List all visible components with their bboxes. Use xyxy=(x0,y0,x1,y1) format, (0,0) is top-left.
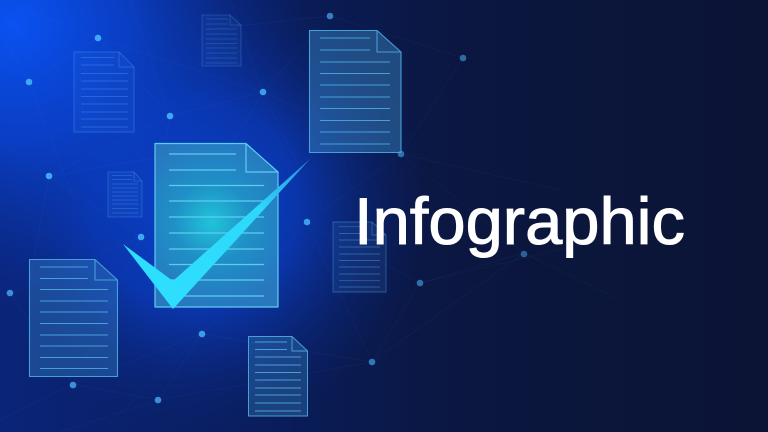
document: faint right behind title xyxy=(333,222,386,292)
document: faint top centre xyxy=(202,15,241,66)
network nodes xyxy=(7,13,527,403)
document: bottom centre xyxy=(248,336,308,416)
document: bottom left xyxy=(30,260,118,376)
document: faint top left xyxy=(74,52,134,132)
document: faint small left xyxy=(108,172,142,217)
icon: check mark xyxy=(123,159,310,309)
document: top right xyxy=(310,30,401,152)
document: main centre xyxy=(155,144,278,307)
title: Infographic xyxy=(354,184,685,258)
